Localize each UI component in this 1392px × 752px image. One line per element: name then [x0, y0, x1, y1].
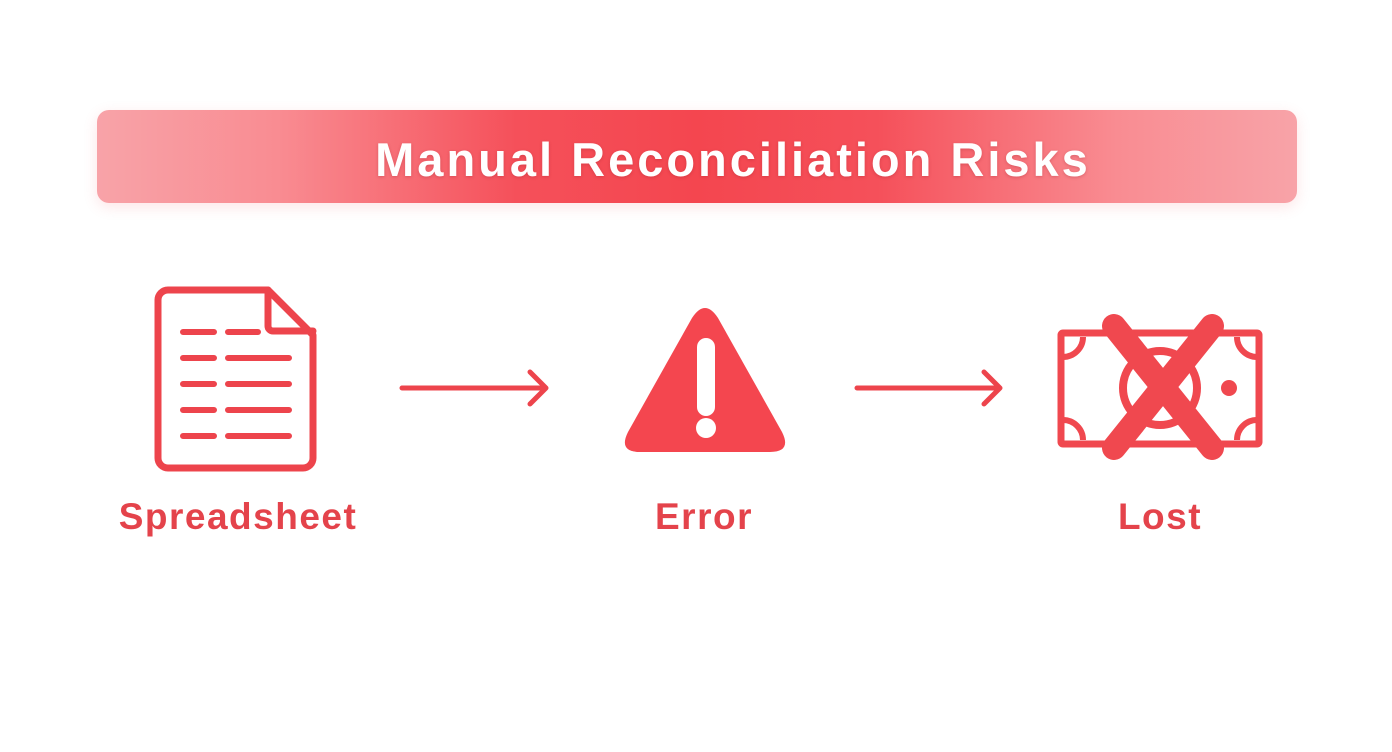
label: spreadsheet: Spreadsheet	[119, 496, 357, 537]
icon: warning triangle	[625, 308, 785, 452]
label: lost: Lost	[1118, 496, 1202, 537]
title banner	[97, 110, 1297, 203]
title banner: Manual Reconciliation Risks	[375, 133, 1091, 186]
label: error: Error	[655, 496, 753, 537]
arrow 2	[857, 372, 1000, 404]
icon: lost money	[1061, 326, 1259, 448]
arrow 1	[402, 372, 546, 404]
icon: spreadsheet	[158, 290, 313, 468]
